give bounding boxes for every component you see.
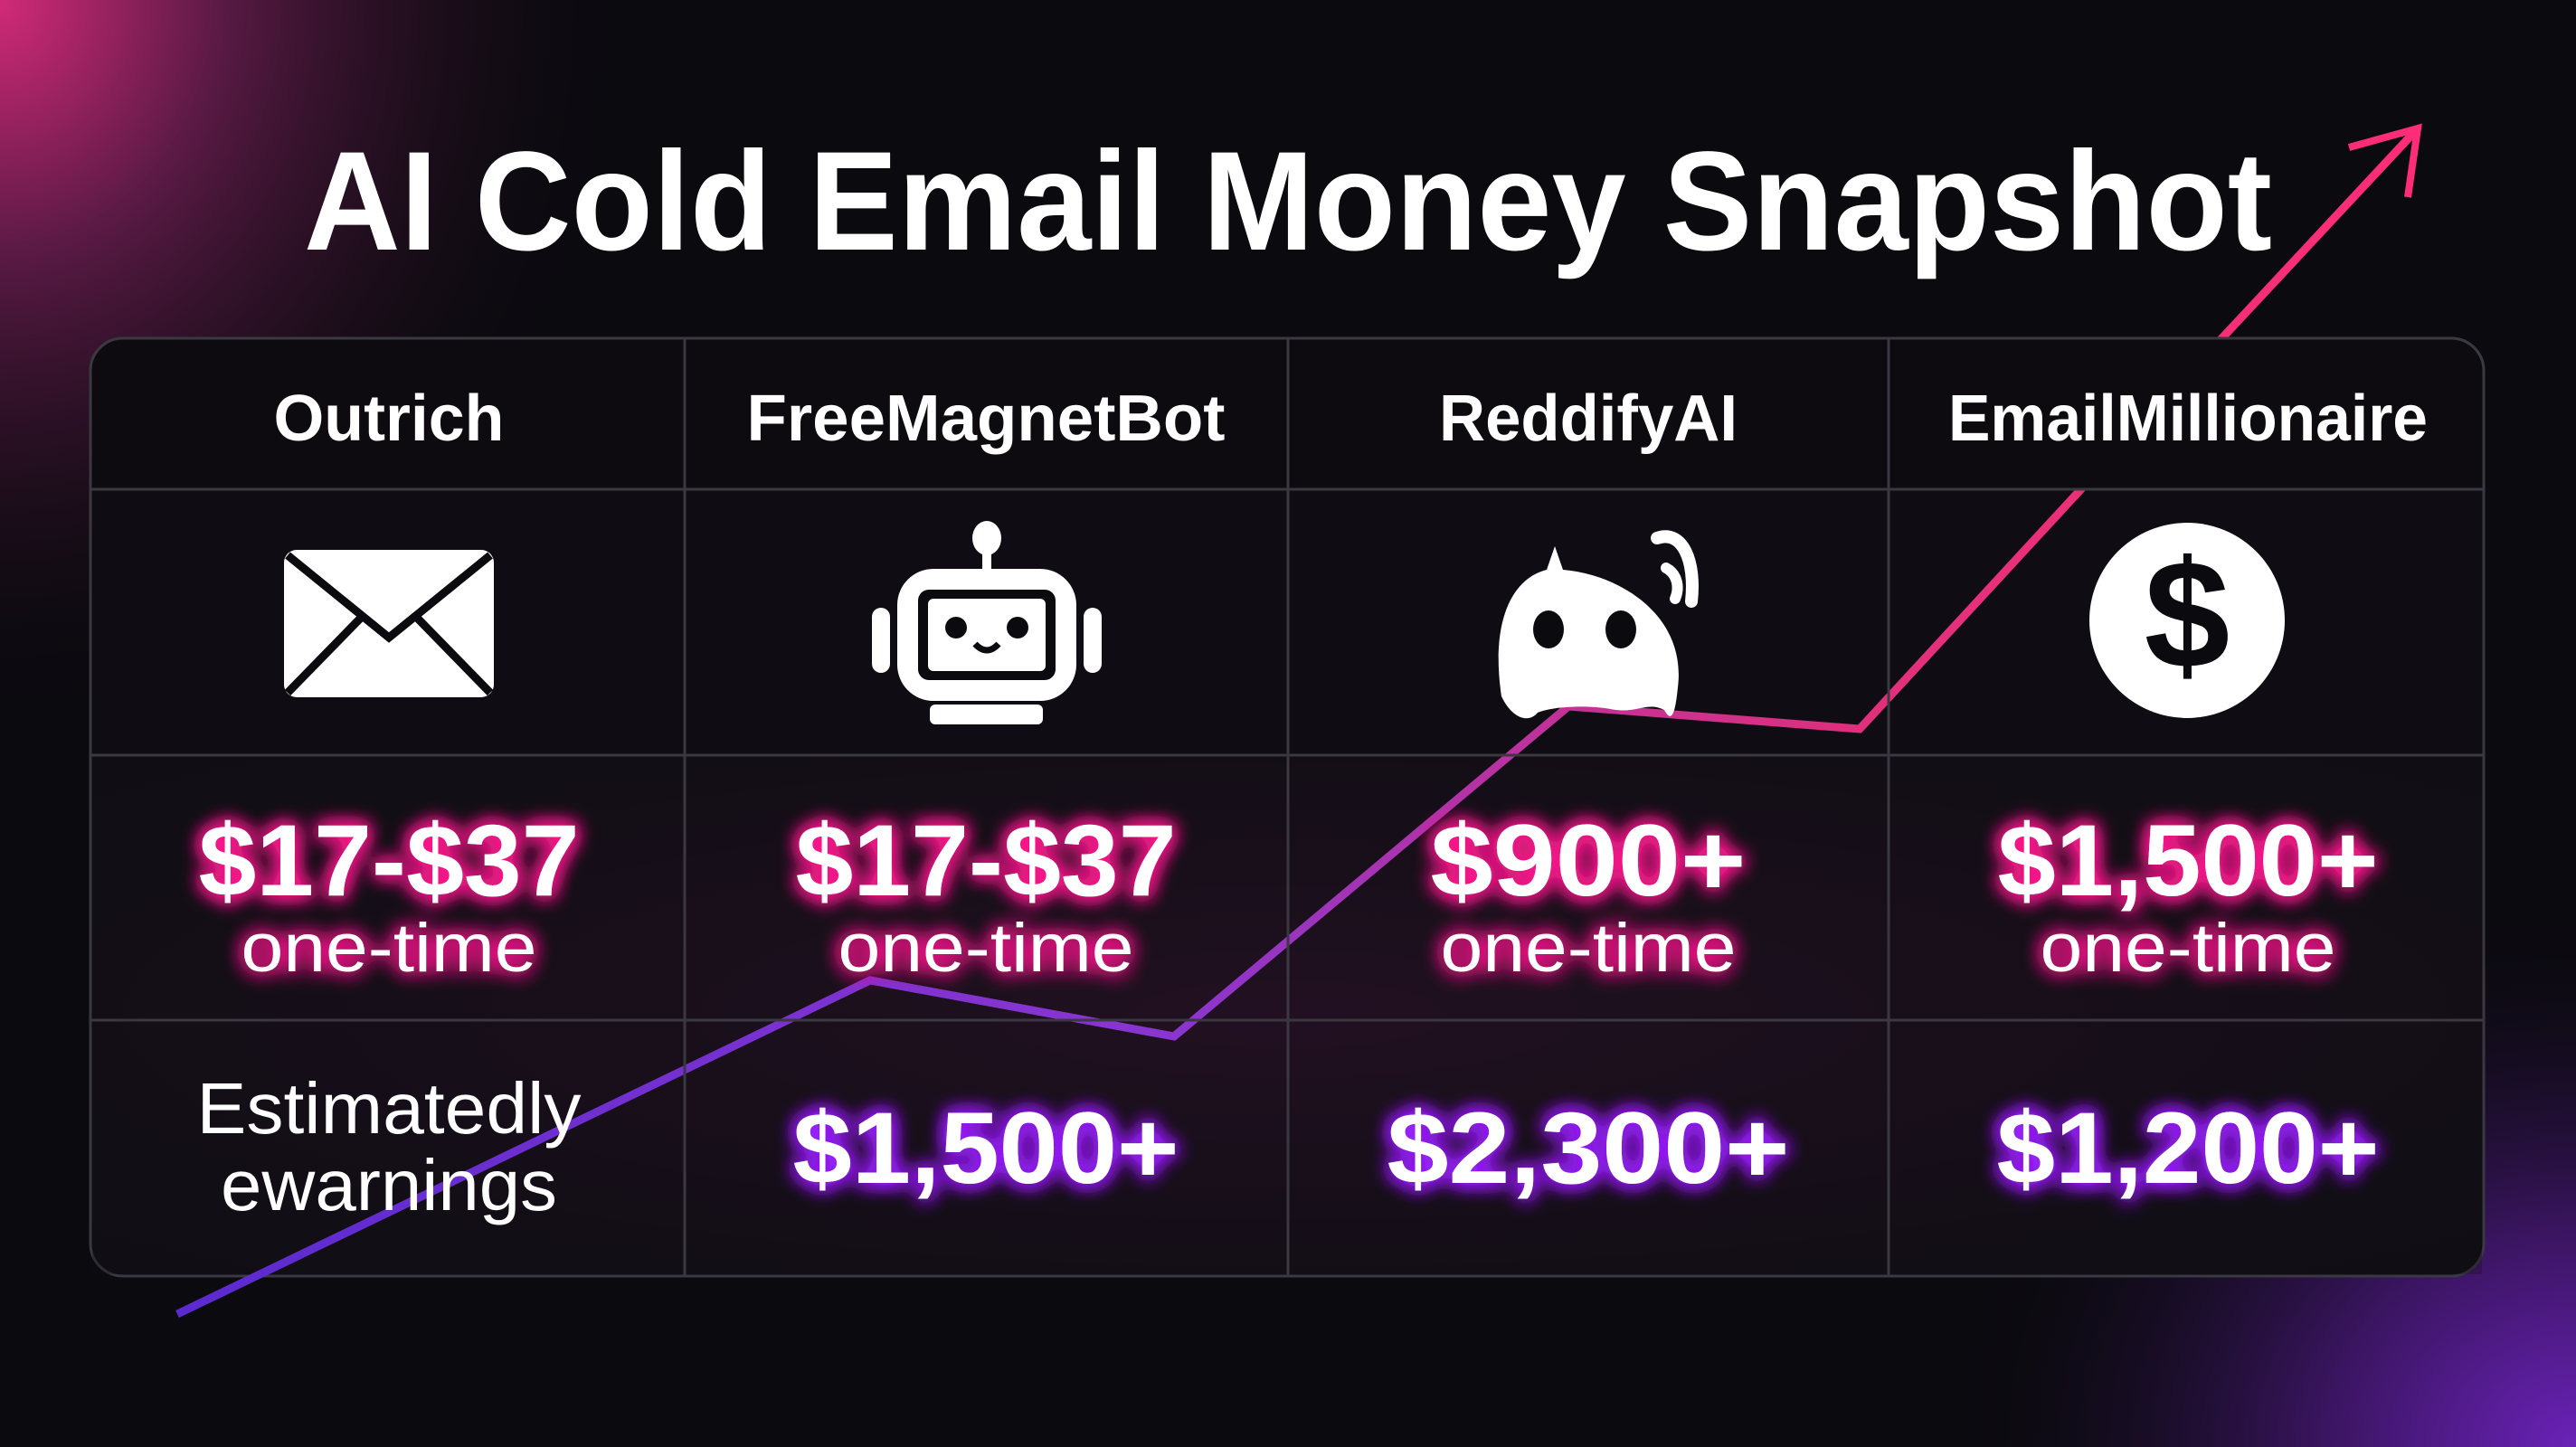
table background (90, 338, 2484, 1276)
prices row (199, 804, 2379, 987)
prices row: $17-$37 (199, 804, 579, 917)
prices row: $900+ (1431, 804, 1746, 917)
icon: ghost bot (1499, 536, 1692, 718)
header row (90, 338, 2484, 489)
header: FreeMagnetBot: FreeMagnetBot (747, 383, 1226, 455)
header: Outrich: Outrich (273, 383, 505, 455)
icon: envelope (284, 550, 494, 697)
earnings label: ewarnings (221, 1145, 557, 1225)
earnings label (197, 1068, 581, 1225)
header: ReddifyAI: ReddifyAI (1439, 383, 1738, 455)
trend line arrow (177, 128, 2418, 1314)
title: AI Cold Email Money Snapshot (304, 123, 2272, 280)
icon: dollar coin (2089, 523, 2285, 718)
earnings label: Estimatedly (197, 1068, 581, 1149)
prices row: $17-$37 (796, 804, 1176, 917)
icon: robot (872, 521, 1102, 724)
earnings values: $1,200+ (1997, 1092, 2379, 1205)
prices row: one-time (2041, 910, 2335, 987)
prices row: one-time (241, 910, 537, 987)
prices row: $1,500+ (1997, 804, 2379, 917)
prices row: one-time (838, 910, 1134, 987)
header: EmailMillionaire: EmailMillionaire (1948, 383, 2428, 455)
earnings values (792, 1092, 2379, 1205)
earnings values: $1,500+ (792, 1092, 1179, 1205)
prices row: one-time (1440, 910, 1737, 987)
earnings values: $2,300+ (1387, 1092, 1789, 1205)
icon: dollar coin: $ (2145, 529, 2230, 701)
